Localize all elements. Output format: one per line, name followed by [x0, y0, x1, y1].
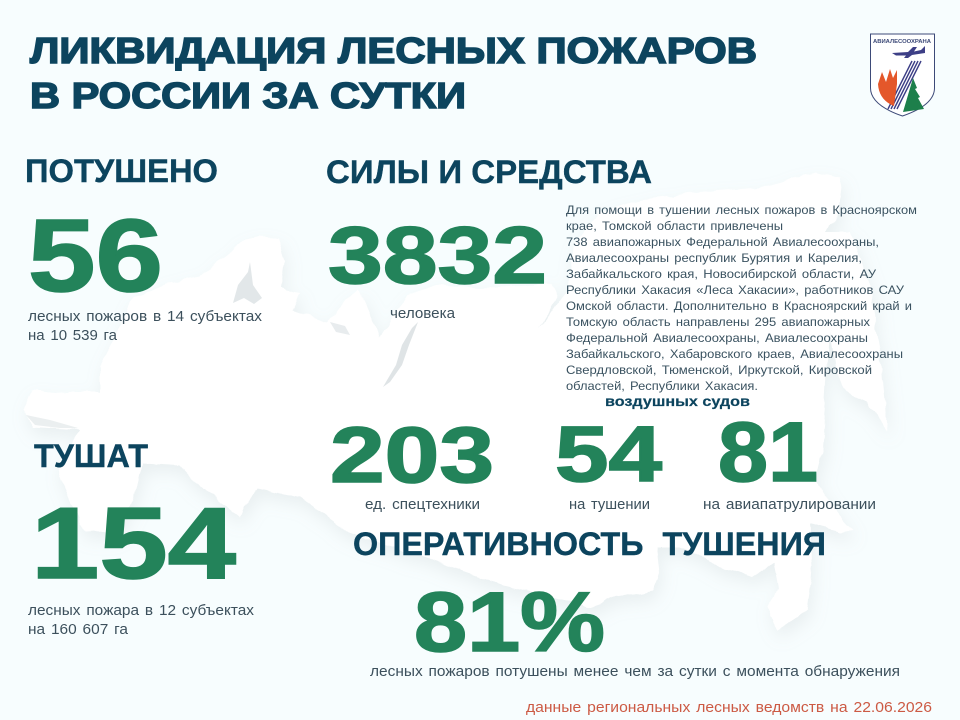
background map of Russia — [23, 172, 888, 630]
logo: Avialesookhrana shield: АВИАЛЕСООХРАНА — [873, 39, 931, 45]
text block: reinforcement details — [566, 203, 917, 393]
stat: 203 vehicles: 203 — [330, 410, 494, 499]
panel: extinguished fires: на 10 539 га — [28, 328, 118, 344]
text block: reinforcement details: Омской области. Дополнительно в Красноярский край и — [566, 299, 912, 313]
stat: 81 patrol aircraft — [703, 405, 876, 513]
stat: 203 vehicles — [330, 410, 494, 513]
text block: reinforcement details: Свердловской, Тюменской, Иркутской, Кировской — [566, 363, 872, 377]
stat: 3832 people: 3832 — [328, 211, 547, 301]
panel: response speed — [353, 526, 900, 680]
panel: response speed: 81% — [414, 575, 605, 669]
text block: reinforcement details: Федеральной Авиалесоохраны, Авиалесоохраны — [566, 331, 868, 345]
stat: 81 patrol aircraft: на авиапатрулировании — [703, 497, 876, 513]
text block: reinforcement details: Республики Хакасия «Леса Хакасии», работников САУ — [566, 283, 904, 297]
panel: response speed: лесных пожаров потушены менее чем за сутки с момента обнаружения — [370, 664, 900, 680]
panel: active fires — [28, 438, 255, 638]
footer source note: данные региональных лесных ведомств на 22.06.2026 — [526, 699, 932, 716]
stat: 81 patrol aircraft: 81 — [718, 405, 818, 499]
text block: reinforcement details: Для помощи в тушении лесных пожаров в Красноярском — [566, 203, 917, 217]
text block: reinforcement details: Забайкальского края, Новосибирской области, АУ — [566, 267, 876, 281]
stat: 3832 people — [328, 211, 547, 322]
panel: forces and means heading: СИЛЫ И СРЕДСТВА — [326, 154, 652, 190]
text block: reinforcement details: Забайкальского, Хабаровского краев, Авиалесоохраны — [566, 347, 903, 361]
stat: 54 firefighting aircraft: 54 — [555, 409, 662, 498]
text block: reinforcement details: Томскую область направлены 295 авиапожарных — [566, 315, 870, 329]
stat: 3832 people: человека — [390, 306, 456, 322]
text block: reinforcement details: Авиалесоохраны республик Бурятия и Карелия, — [566, 251, 862, 265]
panel: active fires: 154 — [31, 488, 236, 600]
title: В РОССИИ ЗА СУТКИ — [30, 75, 466, 116]
label: aircraft: воздушных судов — [605, 393, 750, 409]
panel: response speed: ОПЕРАТИВНОСТЬ ТУШЕНИЯ — [353, 526, 826, 562]
panel: active fires: ТУШАТ — [34, 438, 148, 474]
title: ЛИКВИДАЦИЯ ЛЕСНЫХ ПОЖАРОВ — [30, 30, 757, 71]
stat: 54 firefighting aircraft: на тушении — [569, 497, 650, 513]
text block: reinforcement details: областей, Республики Хакасия. — [566, 379, 758, 393]
text block: reinforcement details: 738 авиапожарных Федеральной Авиалесоохраны, — [566, 235, 879, 249]
panel: extinguished fires: 56 — [28, 198, 163, 313]
panel: active fires: на 160 607 га — [28, 622, 129, 638]
panel: active fires: лесных пожара в 12 субъектах — [28, 603, 255, 619]
panel: extinguished fires: ПОТУШЕНО — [25, 153, 218, 189]
stat: 203 vehicles: ед. спецтехники — [365, 497, 480, 513]
panel: extinguished fires: лесных пожаров в 14 субъектах — [28, 309, 263, 325]
logo: Avialesookhrana shield — [870, 34, 934, 116]
text block: reinforcement details: крае, Томской области привлечены — [566, 219, 783, 233]
title — [30, 30, 757, 116]
panel: extinguished fires — [25, 153, 263, 344]
